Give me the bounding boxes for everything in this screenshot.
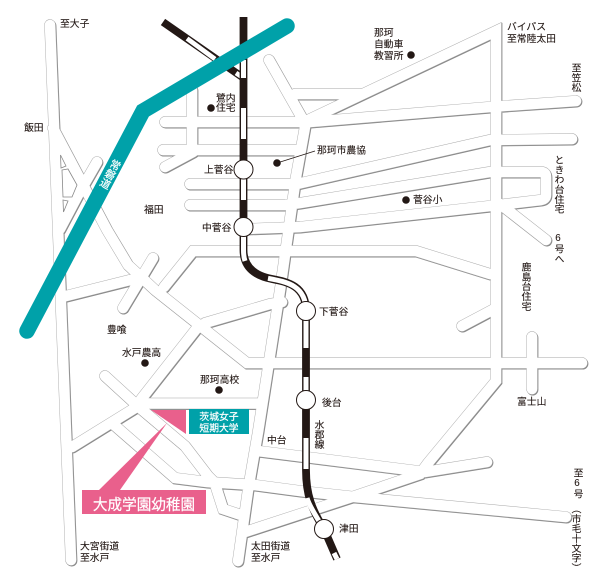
place labels: 那珂市農協 (317, 144, 366, 156)
location markers (141, 51, 415, 394)
place labels: 飯田 (24, 122, 44, 134)
place labels: 自動車 (374, 38, 404, 50)
vertical labels: 鹿島台住宅 (520, 261, 531, 311)
place labels: 教習所 (374, 49, 404, 62)
place labels: 下菅谷 (319, 306, 349, 318)
place labels: 鷺内 (216, 92, 236, 104)
place labels: 大宮街道 (80, 540, 119, 552)
vertical labels: （市毛十文字） (570, 504, 581, 573)
place labels: バイパス (507, 21, 546, 33)
place labels: 中台 (267, 434, 287, 446)
place labels: 住宅 (216, 101, 236, 114)
place labels: 至水戸 (80, 552, 110, 564)
place labels: 太田街道 (251, 540, 290, 552)
place labels: 上菅谷 (204, 164, 234, 176)
rail: branch line (163, 22, 245, 79)
vertical labels: 水郡線 (312, 420, 324, 450)
junior college label: 短期大学 (199, 422, 239, 434)
kindergarten label (82, 490, 206, 514)
vertical labels: 至笠松 (570, 63, 581, 93)
place labels: 至大子 (60, 17, 90, 30)
junior college label (189, 409, 249, 434)
vertical labels: 6号へ (552, 233, 564, 264)
small blocks between the left roads (59, 150, 82, 222)
place labels: 至常陸太田 (507, 32, 556, 45)
place labels: 津田 (339, 523, 359, 535)
place labels: 後台 (322, 396, 342, 409)
place labels: 那珂高校 (200, 373, 239, 386)
rail: Suigun line (244, 17, 337, 559)
expressway (27, 26, 287, 331)
place labels: 菅谷小 (413, 194, 443, 206)
place labels: 水戸農高 (122, 346, 161, 359)
place labels: 豊喰 (107, 323, 127, 336)
place labels: 福田 (144, 203, 164, 216)
place labels: 富士山 (517, 395, 546, 408)
pink kindergarten site and pointer (99, 410, 186, 490)
expressway name: 常磐道 (97, 157, 123, 191)
station circles (234, 160, 334, 538)
junior college label: 茨城女子 (199, 410, 239, 423)
kindergarten label: 大成学園幼稚園 (93, 496, 195, 514)
place labels: 至水戸 (251, 552, 281, 564)
vertical labels: ときわ台住宅 (552, 155, 564, 214)
place labels: 那珂 (374, 27, 394, 39)
place labels: 中菅谷 (202, 221, 232, 234)
vertical labels: 至6号 (572, 468, 583, 499)
vertical labels (312, 63, 583, 573)
